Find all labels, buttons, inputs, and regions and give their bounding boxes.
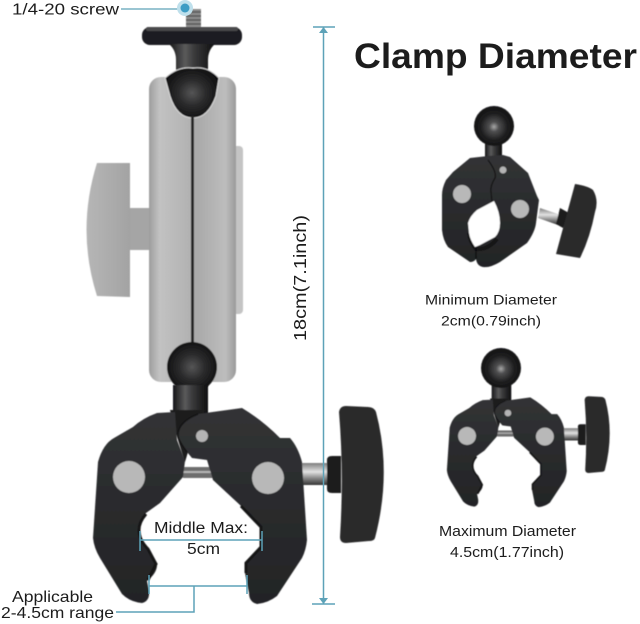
maximum diameter label: 4.5cm(1.77inch) <box>450 545 564 561</box>
icon: tripod plate and screw <box>142 9 242 78</box>
maximum diameter label: Maximum Diameter <box>439 524 576 540</box>
silver body <box>149 77 236 382</box>
small clamp: minimum diameter <box>442 106 597 267</box>
mount arm: silver body with knob and ball joints <box>86 9 243 392</box>
applicable range callout: 2-4.5cm range <box>1 605 114 622</box>
center slit <box>191 116 194 346</box>
screw callout: 1/4-20 screw <box>12 2 120 18</box>
applicable range callout <box>1 575 247 622</box>
knob: grey side knob <box>86 163 150 297</box>
screw callout <box>12 0 193 18</box>
minimum diameter label: Minimum Diameter <box>425 292 557 308</box>
small clamp: maximum diameter <box>447 348 610 507</box>
height dimension line <box>312 27 335 604</box>
main clamp <box>93 385 384 604</box>
lower ball joint <box>167 342 217 392</box>
back tab <box>232 146 243 314</box>
upper ball joint <box>165 68 219 118</box>
title: Clamp Diameter <box>354 37 637 76</box>
maximum diameter label <box>439 524 576 561</box>
minimum diameter label <box>425 292 557 328</box>
applicable range callout: Applicable <box>12 589 93 606</box>
height label: 18cm(7.1inch) <box>290 215 310 341</box>
middle max measurement: 5cm <box>187 541 220 558</box>
middle max measurement: Middle Max: <box>154 520 248 537</box>
minimum diameter label: 2cm(0.79inch) <box>441 314 541 328</box>
middle max measurement <box>140 520 262 558</box>
